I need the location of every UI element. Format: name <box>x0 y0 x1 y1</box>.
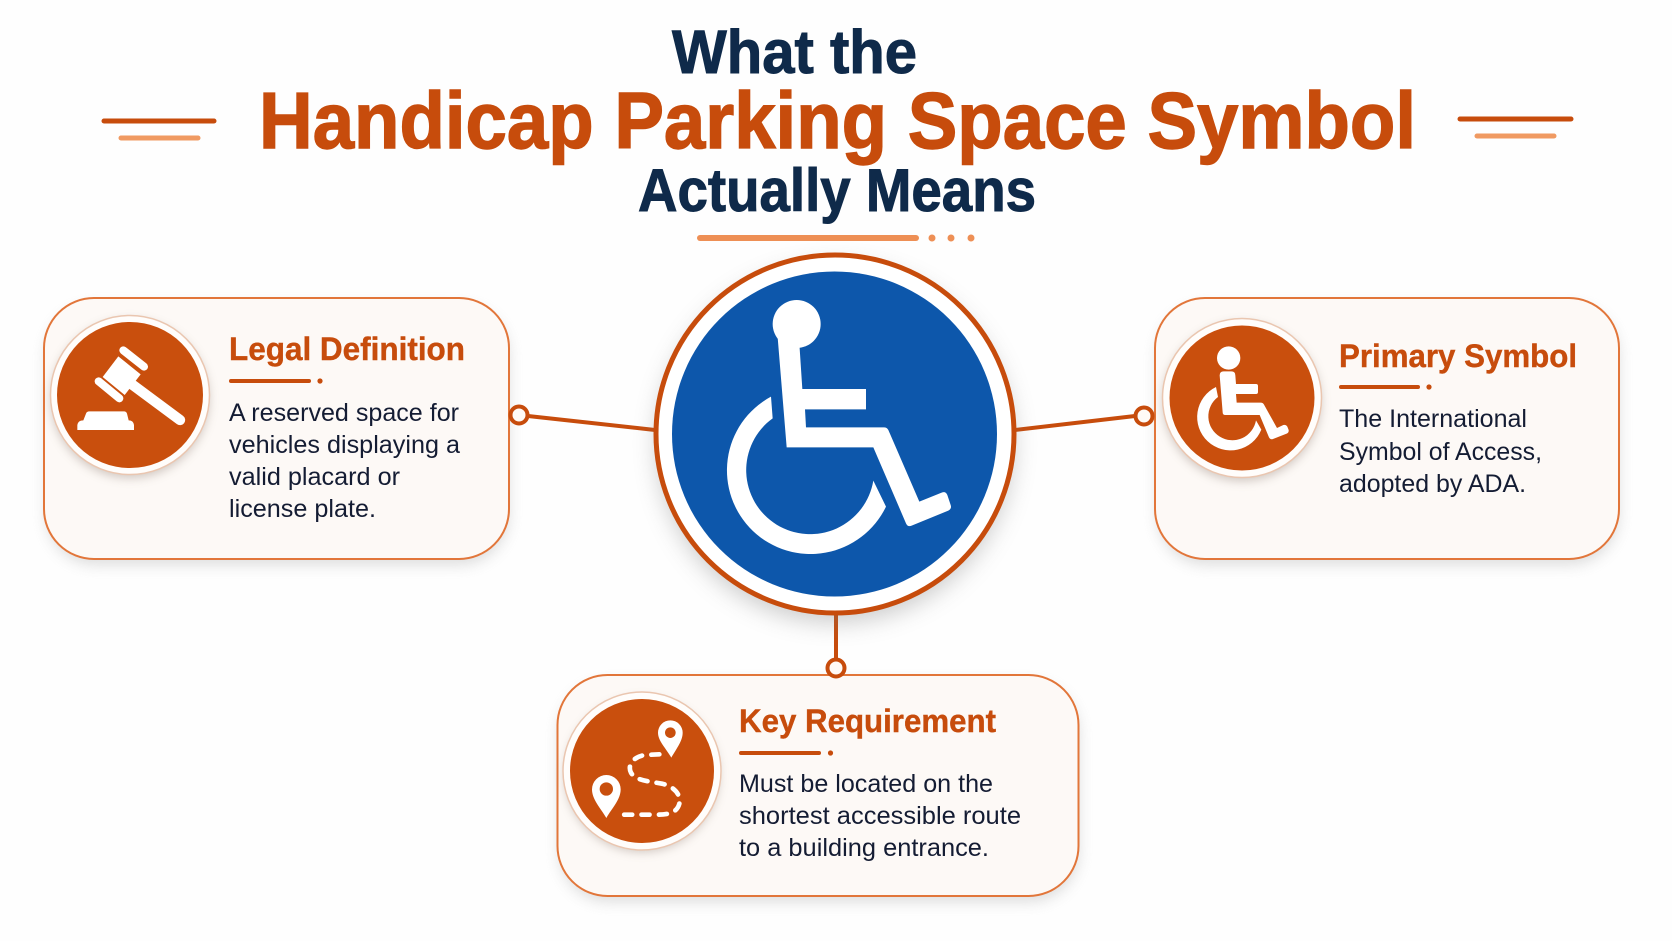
text block: license plate. <box>229 495 376 523</box>
title line: Actually Means: Actually Means <box>638 157 1036 224</box>
text block: valid placard or <box>229 463 400 491</box>
connector node: left <box>510 406 528 424</box>
text block: adopted by ADA. <box>1339 470 1526 498</box>
text block: Symbol of Access, <box>1339 438 1542 466</box>
title underline with dots <box>697 234 974 242</box>
connector: center to left card <box>528 416 655 430</box>
icon: wheelchair small <box>1162 318 1322 481</box>
heading rule <box>739 750 833 756</box>
text block: The International <box>1339 405 1527 433</box>
title ornament: right lines <box>1460 119 1571 136</box>
connector node: bottom <box>828 660 844 676</box>
icon: wheelchair <box>727 300 951 554</box>
heading: Primary Symbol <box>1339 338 1577 374</box>
title line: Handicap Parking Space Symbol: Handicap Parking Space Symbol <box>259 76 1416 165</box>
icon: route with pins <box>563 692 721 852</box>
title <box>259 18 1416 224</box>
center sign: international symbol of access <box>656 255 1014 622</box>
text block: vehicles displaying a <box>229 431 460 459</box>
heading rule <box>229 378 323 384</box>
icon: gavel <box>50 316 210 478</box>
connector: center to bottom card <box>834 612 838 660</box>
panel: primary symbol <box>1155 298 1619 565</box>
text block <box>739 770 1021 862</box>
text block: to a building entrance. <box>739 834 989 862</box>
connector node: right <box>1136 408 1152 424</box>
text block: shortest accessible route <box>739 802 1021 830</box>
text block: Must be located on the <box>739 770 993 798</box>
text block <box>229 399 460 523</box>
text block <box>1339 405 1542 498</box>
panel: key requirement <box>558 675 1079 902</box>
connector: center to right card <box>1015 416 1135 430</box>
panel: legal definition <box>44 298 509 565</box>
heading: Legal Definition <box>229 331 465 367</box>
title ornament: left lines <box>104 121 214 138</box>
heading: Key Requirement <box>739 703 996 739</box>
text block: A reserved space for <box>229 399 459 427</box>
title line: What the: What the <box>672 18 917 86</box>
heading rule <box>1339 384 1432 390</box>
